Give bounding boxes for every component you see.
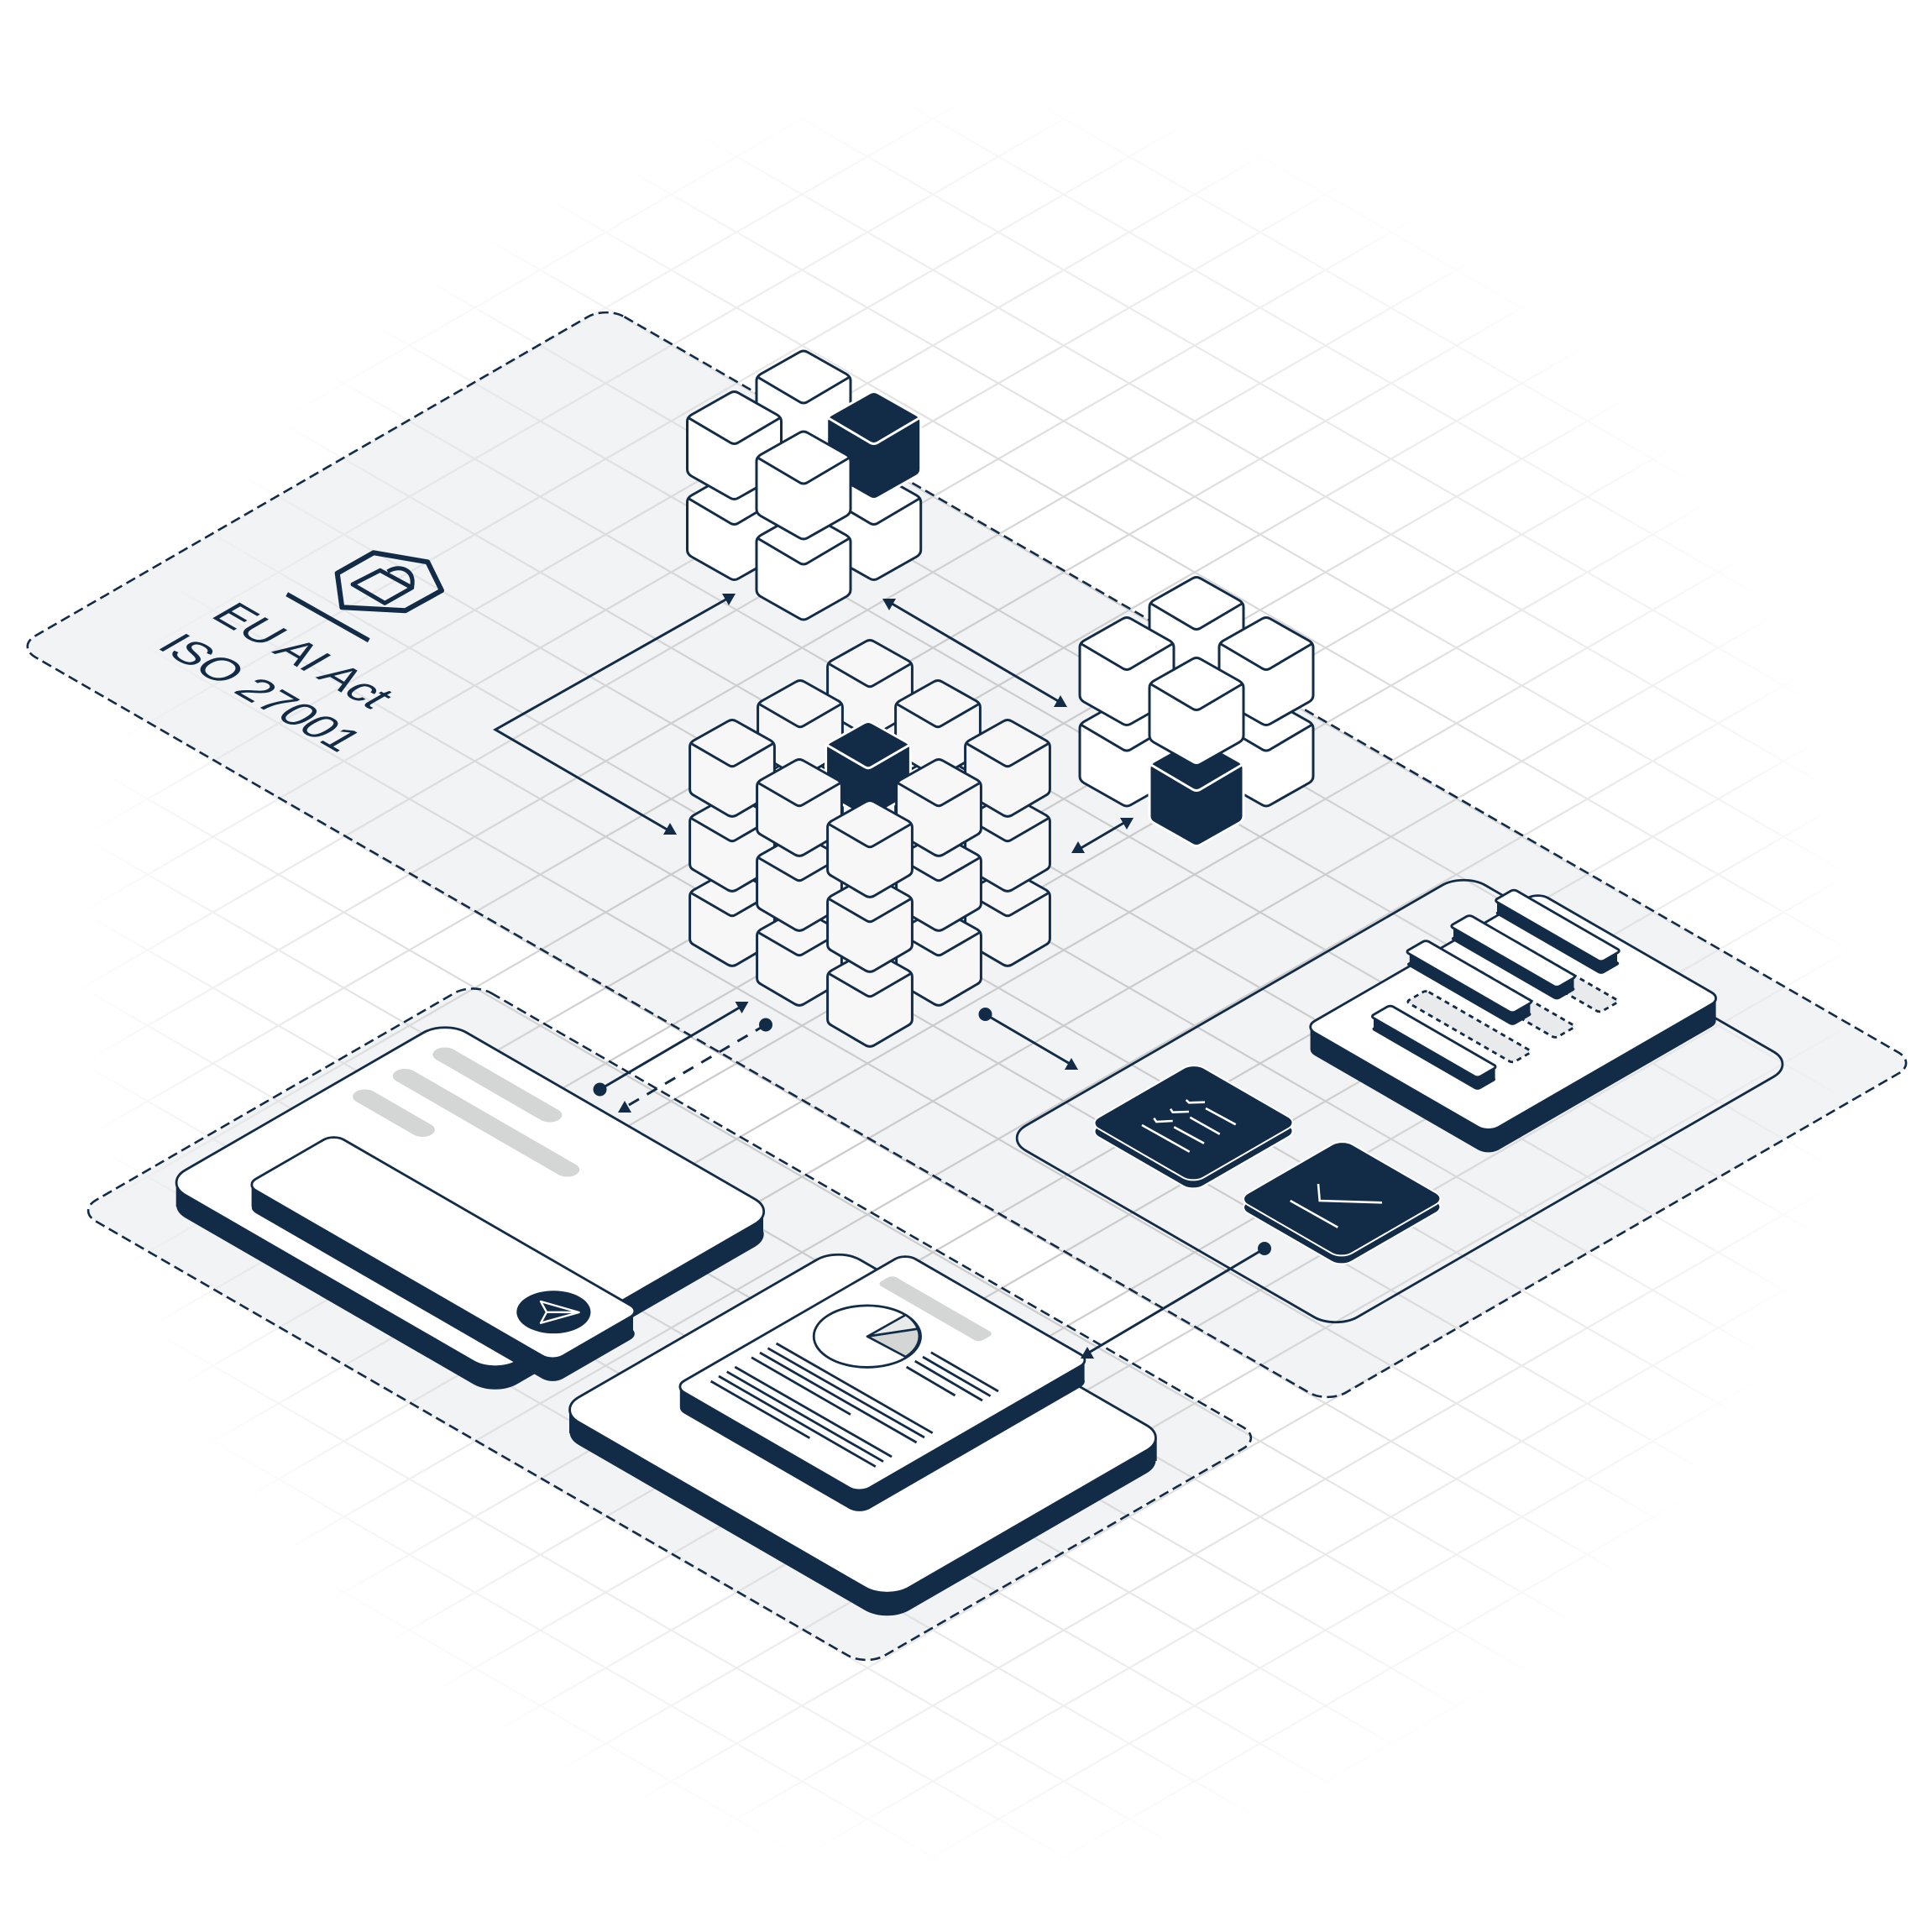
empty dashed slots xyxy=(1406,940,1620,1063)
card shadow layer xyxy=(1088,1071,1299,1192)
input box face xyxy=(246,1134,641,1362)
card face xyxy=(1088,1062,1299,1184)
card face xyxy=(1238,1139,1446,1259)
raised bar 1 xyxy=(1370,1005,1497,1091)
input box extrusion xyxy=(246,1157,641,1385)
panel: outputs inner tray xyxy=(1004,873,1795,1330)
icon: check mark xyxy=(1291,1184,1382,1228)
label: EU AI Act: EU AI Act xyxy=(201,596,406,715)
chat window face xyxy=(164,1020,777,1374)
panel: report document xyxy=(674,1253,1091,1515)
report base face xyxy=(557,1248,1169,1600)
arrow: dashed return to chat xyxy=(618,1018,772,1113)
document face xyxy=(674,1253,1091,1494)
board extrusion xyxy=(1305,915,1722,1155)
card shadow layer xyxy=(1238,1147,1446,1268)
compliance label block xyxy=(147,552,442,758)
icon: shield with lock xyxy=(338,552,442,610)
pie chart xyxy=(792,1293,943,1380)
card: approval check xyxy=(1238,1139,1446,1268)
panel fill: user workspace zone xyxy=(77,982,1262,1666)
cube cluster: right xyxy=(1080,578,1313,846)
raised bar 3 xyxy=(1450,915,1576,1001)
card: checklist xyxy=(1088,1062,1299,1192)
arrow: chat to centre cluster xyxy=(593,1002,749,1097)
label: ISO 27001: ISO 27001 xyxy=(147,627,374,758)
arrow: top cluster to right cluster xyxy=(882,599,1067,707)
arrow: input splits to top and centre clusters xyxy=(495,594,736,835)
document extrusion xyxy=(674,1275,1091,1515)
divider rule xyxy=(287,594,369,641)
arrow: outputs tray to report xyxy=(1081,1242,1271,1359)
raised bar 2 xyxy=(1406,940,1533,1026)
panel: ranking board xyxy=(1305,889,1722,1155)
report base extrusion xyxy=(557,1270,1169,1623)
arrow: centre cluster to right cluster xyxy=(1071,818,1134,853)
cube cluster: top xyxy=(687,351,921,620)
panel: report base xyxy=(557,1248,1169,1623)
board face xyxy=(1305,892,1722,1134)
background isometric grid xyxy=(156,172,1776,1793)
panel fill: compliance zone xyxy=(17,306,1917,1403)
document title bar xyxy=(877,1275,994,1343)
cube cluster: centre xyxy=(690,640,1050,1046)
panel outline: compliance zone xyxy=(17,306,1917,1403)
icon: send button xyxy=(501,1282,606,1343)
panel: prompt chat window xyxy=(164,1020,777,1397)
icon: checklist lines xyxy=(1142,1100,1236,1152)
document text lines xyxy=(711,1343,998,1467)
raised bar 4 xyxy=(1495,889,1620,975)
chat window extrusion xyxy=(164,1043,777,1397)
placeholder text bars xyxy=(348,1043,623,1202)
arrow: centre cluster to outputs tray xyxy=(979,1008,1078,1070)
panel outline: user workspace zone xyxy=(77,982,1262,1666)
